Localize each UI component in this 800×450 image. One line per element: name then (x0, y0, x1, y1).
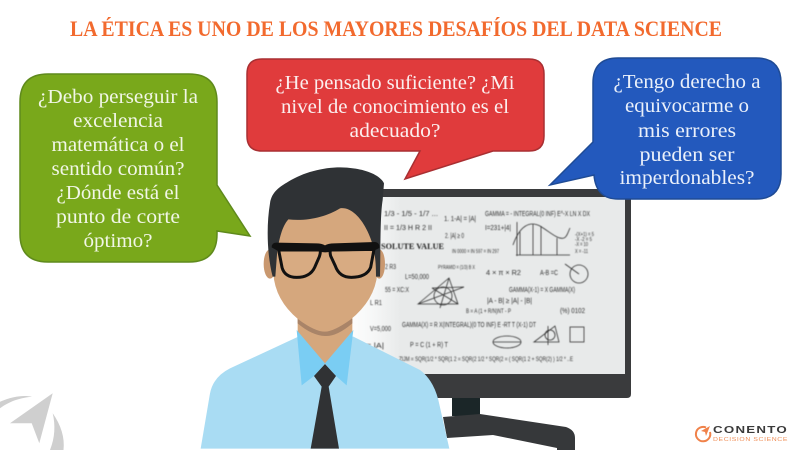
face (273, 200, 377, 332)
formulas on screen: II = 1/3 H R 2 II (384, 225, 432, 232)
red bubble text: nivel de conocimiento es el (281, 96, 509, 118)
neck shadow (298, 319, 352, 336)
formulas on screen: X = -11 (575, 249, 588, 255)
formulas on screen: V=5,000 (370, 326, 391, 333)
blue bubble text: mis errores (638, 120, 736, 142)
formulas on screen: L R1 (370, 300, 382, 307)
red bubble text: ¿He pensado suficiente? ¿Mi (276, 72, 515, 94)
green bubble text: matemática o el (52, 134, 185, 156)
title: LA ÉTICA ES UNO DE LOS MAYORES DESAFÍOS DEL DATA SCIENCE (70, 16, 722, 41)
panel: green speech bubble (20, 74, 250, 262)
formulas on screen: GAMMA(X-1) = X GAMMA(X) (509, 287, 575, 294)
shirt (201, 337, 449, 449)
formulas on screen: L=50,000 (405, 274, 429, 281)
blue bubble text: equivocarme o (625, 95, 749, 117)
red bubble text (276, 72, 515, 142)
chart sketch: curve and axes (513, 222, 570, 256)
man (201, 167, 449, 449)
formulas on screen: B = A (1 + R/N)NT - P (466, 309, 511, 315)
geometry sketches (418, 264, 588, 348)
formulas on screen: ZIJM = SQR(1/2 * SQR(1 2 = SQR(2 1/2 * SQR(2 = ( SQR(1 2 + SQR(2) ) 1/2 * ..E (399, 357, 573, 363)
formulas on screen: 2 R3 (385, 264, 396, 271)
tie (311, 364, 339, 449)
panel: blue speech bubble (550, 58, 781, 199)
neck (298, 310, 352, 364)
green bubble text: sentido común? (52, 158, 185, 180)
formulas on screen: IN 0000 = IN 597 = IN 297 (452, 249, 499, 255)
icon: logo ring (696, 426, 710, 441)
formulas on screen: |A - B| ≥ |A| - |B| (487, 298, 532, 305)
monitor screen (345, 197, 625, 374)
ears (264, 249, 385, 279)
icon: grey arrow watermark (0, 393, 64, 450)
blue bubble text: pueden ser (640, 144, 735, 166)
formulas on screen: -X -2 = 5 (575, 237, 592, 243)
formulas on screen: -X = 10 (575, 242, 588, 248)
panel: red speech bubble (247, 59, 544, 179)
monitor stand (443, 396, 575, 450)
glasses (272, 242, 379, 277)
blue bubble text: ¿Tengo derecho a (614, 71, 761, 93)
formulas on screen: -(X+1) = 5 (575, 232, 594, 238)
left lens (279, 250, 320, 277)
formulas on screen: = |A| (366, 343, 384, 350)
monitor (345, 189, 631, 450)
formulas on screen: 4 × π × R2 (486, 270, 521, 277)
green bubble text (38, 86, 198, 252)
green bubble text: óptimo? (84, 230, 153, 252)
formulas on screen: I=231+|4| (485, 225, 511, 232)
formulas on screen: SOLUTE VALUE (381, 241, 444, 251)
formulas on screen: GAMMA = - INTEGRAL(0 INF) E^-X LN X DX (485, 211, 590, 218)
green bubble text: excelencia (73, 110, 163, 132)
formulas on screen: (%) 0102 (560, 308, 585, 315)
green bubble text: ¿Debo perseguir la (38, 86, 198, 108)
formulas on screen: 1/3 - 1/5 - 1/7 ... (384, 211, 438, 218)
monitor frame (370, 189, 631, 398)
formulas on screen: A-B =C (540, 270, 558, 277)
logo: Conento: DECISION SCIENCE (713, 437, 788, 443)
formulas on screen (366, 211, 594, 363)
green bubble text: punto de corte (56, 206, 180, 228)
formulas on screen: 55 = XC:X (385, 287, 409, 294)
green bubble text: ¿Dónde está el (56, 182, 180, 204)
formulas on screen: 2. |A| ≥ 0 (445, 233, 464, 240)
top bar (272, 242, 379, 252)
blue bubble text (614, 71, 761, 189)
red bubble text: adecuado? (350, 120, 441, 142)
collar (297, 330, 353, 385)
formulas on screen: P = C (1 + R) T (410, 342, 449, 349)
hair (268, 167, 384, 277)
formulas on screen: 1. 1-A| = |A| (444, 216, 476, 223)
logo: Conento: CONENTO (713, 424, 788, 436)
blue bubble text: imperdonables? (620, 167, 755, 189)
logo: Conento (696, 424, 788, 443)
formulas on screen: PYRAMID = (1/3) B X (438, 265, 476, 271)
right lens (330, 249, 374, 277)
formulas on screen: GAMMA(X) = R X(INTEGRAL)(0 TO INF) E -RT T (X-1) DT (402, 322, 537, 329)
